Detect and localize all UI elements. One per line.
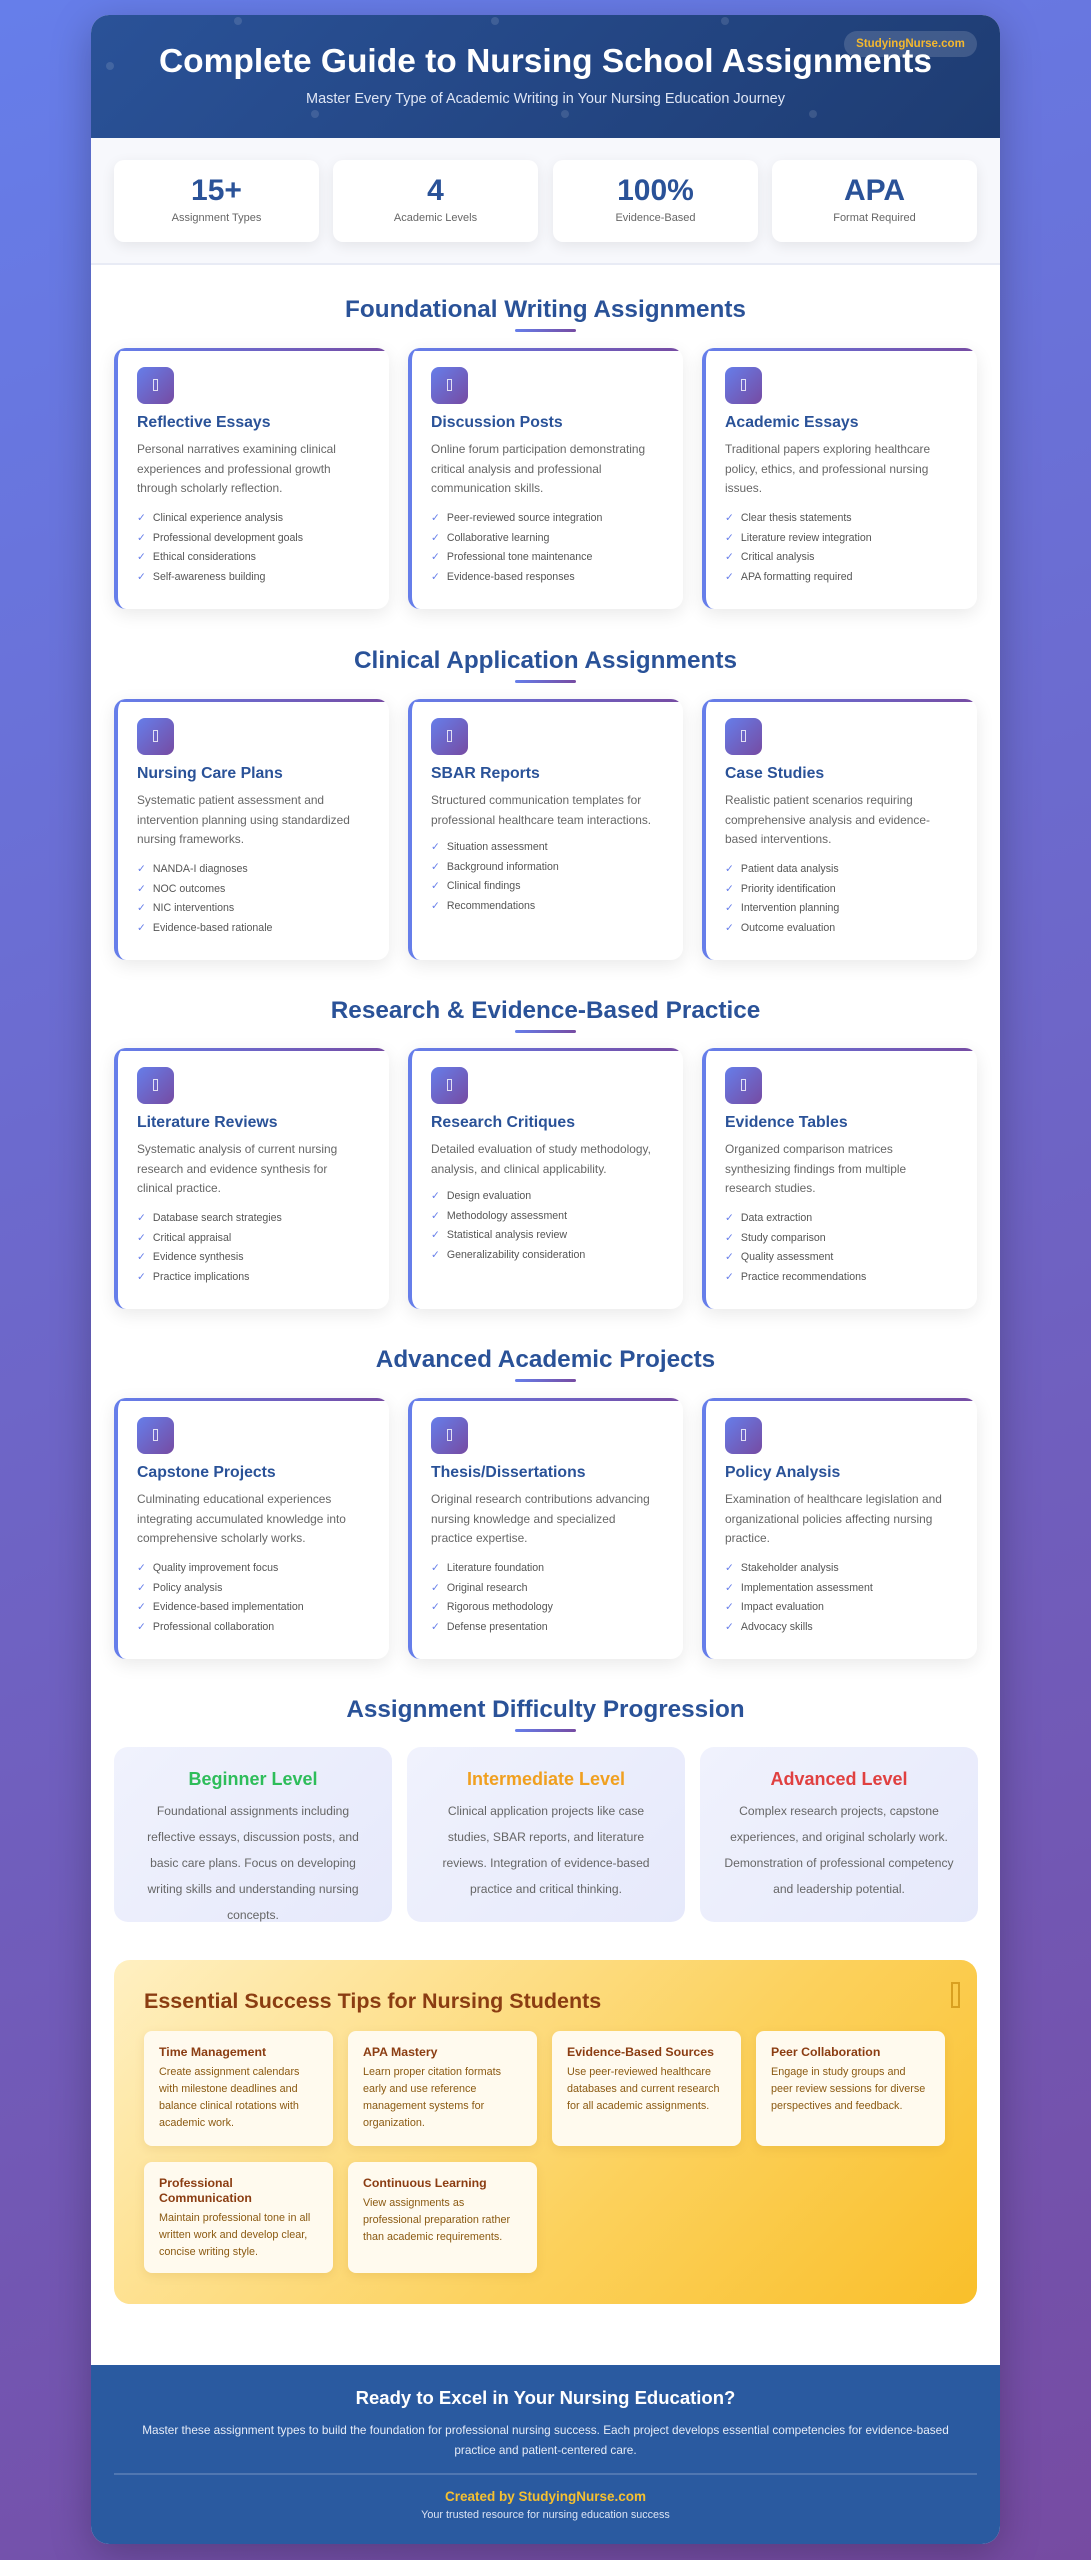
- card: academic essays: APA formatting required: [741, 571, 853, 583]
- card: literature reviews: research and evidence synthesis for: [137, 1162, 327, 1176]
- card: academic essays: Academic Essays: [725, 414, 858, 431]
- card: research critiques: Generalizability consideration: [447, 1249, 585, 1261]
- tip: evidence: [552, 2031, 741, 2146]
- card: capstone: integrating accumulated knowledge into: [137, 1512, 346, 1526]
- card: academic essays: policy, ethics, and professional nursing: [725, 462, 928, 476]
- card: academic essays: Literature review integration: [741, 532, 872, 544]
- tip: learning: Continuous Learning: [363, 2176, 487, 2190]
- card: discussion posts: Peer-reviewed source integration: [447, 512, 602, 524]
- card: care plans: NIC interventions: [153, 902, 234, 914]
- card: evidence tables: Evidence Tables: [725, 1114, 848, 1131]
- card: research critiques: Research Critiques: [431, 1114, 575, 1131]
- card: discussion posts: Professional tone maintenance: [447, 551, 592, 563]
- badge: StudyingNurse.com: [856, 38, 965, 50]
- card: SBAR: Background information: [447, 861, 559, 873]
- footer text: practice and patient-centered care.: [454, 2443, 637, 2457]
- stat: APA: APA: [844, 174, 905, 207]
- stat: APA: [772, 160, 977, 242]
- card: literature reviews: Practice implications: [153, 1271, 249, 1283]
- card: academic essays: Clear thesis statements: [741, 512, 852, 524]
- tip: peer: Engage in study groups and peer review sessions for diverse perspectives and feedback.: [771, 2066, 925, 2112]
- card: discussion posts: Collaborative learning: [447, 532, 549, 544]
- card: thesis: Defense presentation: [447, 1621, 548, 1633]
- card: care plans: Nursing Care Plans: [137, 765, 283, 782]
- badge: [844, 31, 977, 57]
- card: evidence tables: synthesizing findings from multiple: [725, 1162, 906, 1176]
- level: advanced: [700, 1747, 978, 1922]
- card: reflective essays: Reflective Essays: [137, 414, 270, 431]
- heading: foundational: Foundational Writing Assignments: [345, 296, 746, 323]
- card: reflective essays: Self-awareness building: [153, 571, 265, 583]
- tip: peer: Peer Collaboration: [771, 2045, 880, 2059]
- level: intermediate: Intermediate Level: [467, 1769, 625, 1789]
- stat: evidence: [553, 160, 758, 242]
- stat: levels: Academic Levels: [394, 212, 477, 224]
- card: SBAR: Structured communication templates for: [431, 793, 641, 807]
- card: policy analysis: [702, 1398, 977, 1659]
- card: thesis: Rigorous methodology: [447, 1601, 553, 1613]
- level: intermediate: Clinical application projects like case studies, SBAR reports, and literature reviews. Integration of evidence-based practice and critical thinking.: [442, 1804, 650, 1896]
- card: reflective essays: Professional development goals: [153, 532, 303, 544]
- card: literature reviews: Literature Reviews: [137, 1114, 277, 1131]
- card: case studies: Outcome evaluation: [741, 922, 835, 934]
- level: advanced: Complex research projects, capstone experiences, and original scholarly work. Demonstration of professional competency and leadership potential.: [724, 1804, 954, 1896]
- tip: learning: [348, 2162, 537, 2273]
- level: intermediate: [407, 1747, 685, 1922]
- card: care plans: Systematic patient assessment and: [137, 793, 324, 807]
- card: care plans: NANDA-I diagnoses: [153, 863, 248, 875]
- card: evidence tables: Quality assessment: [741, 1251, 833, 1263]
- subtitle: Master Every Type of Academic Writing in Your Nursing Education Journey: [306, 91, 785, 107]
- card: SBAR: Situation assessment: [447, 841, 548, 853]
- card: literature reviews: Critical appraisal: [153, 1232, 231, 1244]
- card: research critiques: Methodology assessment: [447, 1210, 567, 1222]
- stat: APA: Format Required: [833, 212, 916, 224]
- card: case studies: [702, 699, 977, 960]
- icon: tofu: [951, 1982, 960, 2008]
- card: care plans: nursing frameworks.: [137, 832, 244, 846]
- heading: advanced: Advanced Academic Projects: [376, 1346, 715, 1373]
- tip: evidence: Evidence-Based Sources: [567, 2045, 714, 2059]
- card: reflective essays: Personal narratives examining clinical: [137, 442, 336, 456]
- tagline: Your trusted resource for nursing education success: [421, 2509, 670, 2521]
- card: SBAR: SBAR Reports: [431, 765, 540, 782]
- card: reflective essays: [114, 348, 389, 609]
- card: case studies: comprehensive analysis and evidence-: [725, 813, 930, 827]
- card: capstone: [114, 1398, 389, 1659]
- card: discussion posts: [408, 348, 683, 609]
- tips heading: Essential Success Tips for Nursing Students: [144, 1989, 601, 2013]
- card: academic essays: Traditional papers exploring healthcare: [725, 442, 930, 456]
- stats bar: [91, 138, 1000, 265]
- card: care plans: NOC outcomes: [153, 883, 225, 895]
- credit: Created by StudyingNurse.com: [445, 2489, 646, 2504]
- card: thesis: Literature foundation: [447, 1562, 544, 1574]
- card: policy analysis: organizational policies affecting nursing: [725, 1512, 932, 1526]
- card: research critiques: Design evaluation: [447, 1190, 531, 1202]
- stat: evidence: 100%: [617, 174, 694, 207]
- card: reflective essays: through scholarly reflection.: [137, 481, 282, 495]
- stat: types: Assignment Types: [172, 212, 261, 224]
- card: evidence tables: Study comparison: [741, 1232, 826, 1244]
- card: thesis: [408, 1398, 683, 1659]
- card: discussion posts: critical analysis and professional: [431, 462, 602, 476]
- card: capstone: Professional collaboration: [153, 1621, 274, 1633]
- stat: levels: 4: [427, 174, 444, 207]
- tip: communication: Professional Communication: [159, 2176, 252, 2205]
- card: academic essays: issues.: [725, 481, 762, 495]
- card: SBAR: Clinical findings: [447, 880, 520, 892]
- tip: time: Create assignment calendars with milestone deadlines and balance clinical rotations with academic work.: [159, 2066, 299, 2129]
- footer text: Master these assignment types to build the foundation for professional nursing success. Each project develops essential competencies for evidence-based: [142, 2423, 949, 2437]
- tip: APA: Learn proper citation formats early and use reference management systems for organization.: [363, 2066, 501, 2129]
- card: discussion posts: Discussion Posts: [431, 414, 563, 431]
- card: academic essays: Critical analysis: [741, 551, 814, 563]
- footer text: [142, 2423, 949, 2457]
- card: case studies: Realistic patient scenarios requiring: [725, 793, 913, 807]
- card: literature reviews: Evidence synthesis: [153, 1251, 244, 1263]
- card: case studies: Priority identification: [741, 883, 836, 895]
- card: capstone: Culminating educational experiences: [137, 1492, 331, 1506]
- card: care plans: Evidence-based rationale: [153, 922, 272, 934]
- card: evidence tables: Practice recommendations: [741, 1271, 866, 1283]
- card: case studies: Patient data analysis: [741, 863, 839, 875]
- heading: research: Research & Evidence-Based Practice: [331, 997, 760, 1024]
- card: policy analysis: Examination of healthcare legislation and: [725, 1492, 942, 1506]
- tip: APA: APA Mastery: [363, 2045, 438, 2059]
- footer heading: Ready to Excel in Your Nursing Education?: [356, 2387, 735, 2408]
- card: SBAR: [408, 699, 683, 960]
- card: care plans: [114, 699, 389, 960]
- stat: types: 15+: [191, 174, 242, 207]
- heading: clinical: Clinical Application Assignments: [354, 647, 737, 674]
- card: policy analysis: Implementation assessment: [741, 1582, 873, 1594]
- card: case studies: Case Studies: [725, 765, 824, 782]
- tip: communication: Maintain professional tone in all written work and develop clear, concise writing style.: [159, 2212, 310, 2258]
- card: SBAR: professional healthcare team interactions.: [431, 813, 651, 827]
- card: literature reviews: [114, 1048, 389, 1309]
- card: case studies: based interventions.: [725, 832, 831, 846]
- stat: types: [114, 160, 319, 242]
- card: research critiques: [408, 1048, 683, 1309]
- tip: communication: [144, 2162, 333, 2273]
- card: policy analysis: Policy Analysis: [725, 1464, 840, 1481]
- tips panel: [114, 1960, 977, 2304]
- card: evidence tables: Organized comparison matrices: [725, 1142, 893, 1156]
- card: thesis: Original research contributions advancing: [431, 1492, 650, 1506]
- card: capstone: Evidence-based implementation: [153, 1601, 304, 1613]
- card: research critiques: analysis, and clinical applicability.: [431, 1162, 607, 1176]
- card: literature reviews: clinical practice.: [137, 1181, 221, 1195]
- card: thesis: Thesis/Dissertations: [431, 1464, 586, 1481]
- card: discussion posts: Evidence-based responses: [447, 571, 575, 583]
- card: case studies: Intervention planning: [741, 902, 839, 914]
- tip: APA: [348, 2031, 537, 2146]
- title: Complete Guide to Nursing School Assignments: [159, 43, 932, 80]
- card: evidence tables: [702, 1048, 977, 1309]
- card: literature reviews: Database search strategies: [153, 1212, 282, 1224]
- level: beginner: [114, 1747, 392, 1922]
- card: literature reviews: Systematic analysis of current nursing: [137, 1142, 337, 1156]
- card: policy analysis: Impact evaluation: [741, 1601, 824, 1613]
- card: capstone: comprehensive scholarly works.: [137, 1531, 306, 1545]
- card: thesis: practice expertise.: [431, 1531, 528, 1545]
- stat: levels: [333, 160, 538, 242]
- footer: [91, 2365, 1000, 2544]
- card: thesis: Original research: [447, 1582, 528, 1594]
- card: evidence tables: research studies.: [725, 1181, 816, 1195]
- stat: evidence: Evidence-Based: [615, 212, 696, 224]
- card: evidence tables: Data extraction: [741, 1212, 812, 1224]
- heading: difficulty: Assignment Difficulty Progression: [346, 1696, 745, 1723]
- card: policy analysis: Stakeholder analysis: [741, 1562, 839, 1574]
- card: capstone: Capstone Projects: [137, 1464, 276, 1481]
- card: reflective essays: experiences and professional growth: [137, 462, 331, 476]
- card: thesis: nursing knowledge and specialized: [431, 1512, 615, 1526]
- card: research critiques: Statistical analysis review: [447, 1229, 567, 1241]
- card: care plans: intervention planning using standardized: [137, 813, 350, 827]
- tip: peer: [756, 2031, 945, 2146]
- card: academic essays: [702, 348, 977, 609]
- card: discussion posts: communication skills.: [431, 481, 543, 495]
- card: capstone: Quality improvement focus: [153, 1562, 278, 1574]
- card: reflective essays: Clinical experience analysis: [153, 512, 283, 524]
- card: reflective essays: Ethical considerations: [153, 551, 256, 563]
- card: research critiques: Detailed evaluation of study methodology,: [431, 1142, 651, 1156]
- tip: time: Time Management: [159, 2045, 266, 2059]
- tip: learning: View assignments as professional preparation rather than academic requirements.: [363, 2197, 510, 2243]
- card: capstone: Policy analysis: [153, 1582, 222, 1594]
- level: beginner: Foundational assignments including reflective essays, discussion posts, and basic care plans. Focus on developing writing skills and understanding nursing concepts.: [147, 1804, 359, 1922]
- card: SBAR: Recommendations: [447, 900, 535, 912]
- level: beginner: Beginner Level: [188, 1769, 318, 1789]
- card: policy analysis: practice.: [725, 1531, 770, 1545]
- tip: time: [144, 2031, 333, 2146]
- card: discussion posts: Online forum participation demonstrating: [431, 442, 645, 456]
- header: [91, 15, 1000, 138]
- tip: evidence: Use peer-reviewed healthcare databases and current research for all academic assignments.: [567, 2066, 719, 2112]
- card: policy analysis: Advocacy skills: [741, 1621, 813, 1633]
- level: advanced: Advanced Level: [770, 1769, 908, 1789]
